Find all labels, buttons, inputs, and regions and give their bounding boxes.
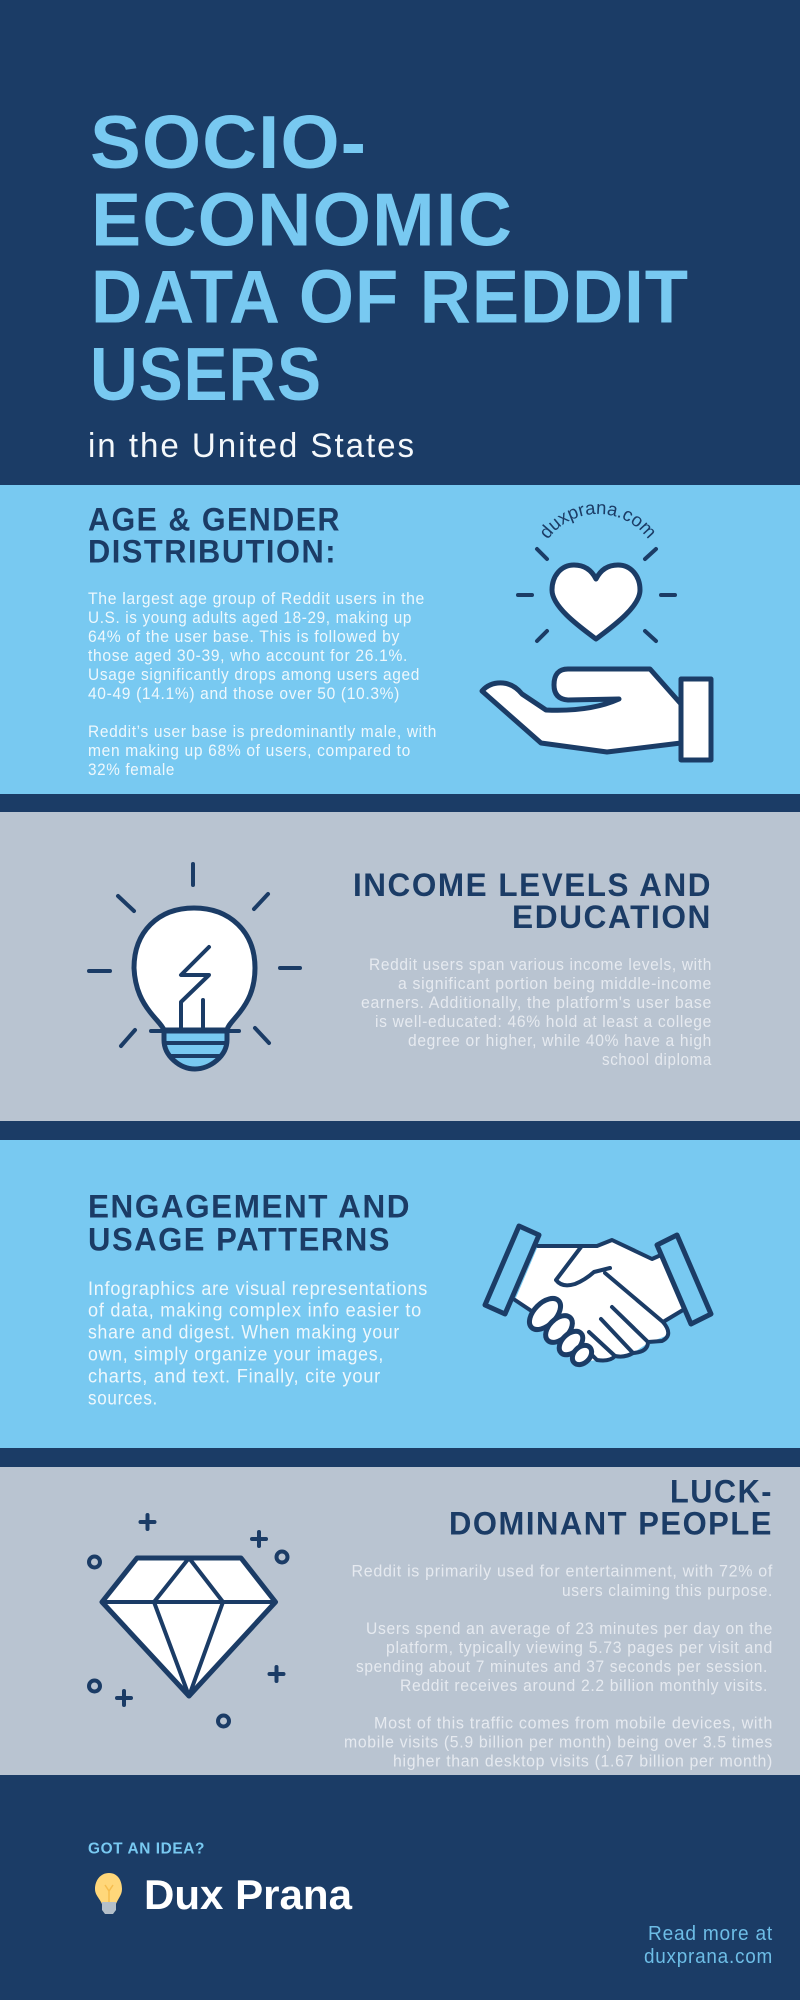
text block: age and gender statistics: [88, 590, 437, 779]
heading: luck-dominant people: LUCK-: [670, 1474, 773, 1510]
heading: engagement and usage patterns: USAGE PATTERNS: [88, 1222, 391, 1258]
text block: income and education statistics: school diploma: [602, 1051, 712, 1069]
title: ECONOMIC: [91, 178, 513, 262]
heading: luck-dominant people: DOMINANT PEOPLE: [449, 1506, 773, 1542]
panel: luck-dominant people: [0, 1467, 800, 1775]
text block: infographics description: [88, 1279, 428, 1410]
panel: income levels and education: [0, 812, 800, 1121]
icon: diamond with sparkles: [89, 1515, 288, 1726]
text block: income and education statistics: [361, 956, 712, 1069]
text block: income and education statistics: degree or higher, while 40% have a high: [408, 1032, 712, 1050]
text block: usage and traffic statistics: spending about 7 minutes and 37 seconds per session.: [356, 1658, 768, 1676]
text block: age and gender statistics: 40-49 (14.1%) and those over 50 (10.3%): [88, 685, 400, 703]
text block: age and gender statistics: U.S. is young adults aged 18-29, making up: [88, 609, 412, 627]
text block: age and gender statistics: Reddit’s user base is predominantly male, with: [88, 723, 437, 741]
title: SOCIO-: [90, 100, 367, 184]
footer: bulb emoji icon: [95, 1873, 122, 1914]
text block: age and gender statistics: Usage significantly drops among users aged: [88, 666, 420, 684]
footer: Dux Prana brand name: Dux Prana: [144, 1871, 353, 1918]
text block: usage and traffic statistics: Most of this traffic comes from mobile devices, with: [374, 1714, 773, 1732]
footer: read more link: Read more at: [648, 1923, 773, 1945]
text block: infographics description: share and digest. When making your: [88, 1322, 400, 1344]
text block: usage and traffic statistics: Reddit receives around 2.2 billion monthly visits.: [400, 1677, 768, 1695]
text block: age and gender statistics: The largest age group of Reddit users in the: [88, 590, 425, 608]
heading: engagement and usage patterns: ENGAGEMENT AND: [88, 1188, 411, 1224]
text block: income and education statistics: a significant portion being middle-income: [398, 975, 712, 993]
text block: usage and traffic statistics: platform, typically viewing 5.73 pages per visit and: [386, 1639, 773, 1657]
icon: handshake: [485, 1226, 711, 1368]
title: [90, 100, 689, 416]
panel: age and gender distribution: [0, 485, 800, 794]
heading: luck-dominant people: [449, 1474, 773, 1542]
text block: infographics description: own, simply organize your images,: [88, 1344, 384, 1366]
text block: usage and traffic statistics: Reddit is primarily used for entertainment, with 72% of: [352, 1562, 773, 1580]
heading: age and gender: DISTRIBUTION:: [88, 534, 337, 570]
curved site label: [542, 504, 654, 538]
text block: age and gender statistics: men making up 68% of users, compared to: [88, 742, 411, 760]
text block: usage and traffic statistics: mobile visits (5.9 billion per month) being over 3.5 times: [344, 1734, 773, 1752]
heading: age and gender: AGE & GENDER: [88, 502, 341, 538]
heading: income levels and education: INCOME LEVELS AND: [353, 867, 712, 903]
text block: infographics description: sources.: [88, 1388, 158, 1410]
panel: engagement and usage patterns: [0, 1140, 800, 1448]
text block: infographics description: Infographics are visual representations: [88, 1279, 428, 1300]
text block: usage and traffic statistics: users claiming this purpose.: [562, 1582, 773, 1600]
icon: heart in open hand: [482, 549, 711, 760]
text block: usage and traffic statistics: Users spend an average of 23 minutes per day on the: [366, 1620, 773, 1638]
heading: age and gender: [88, 502, 341, 570]
footer: got an idea label: GOT AN IDEA?: [88, 1840, 205, 1858]
text block: income and education statistics: Reddit users span various income levels, with: [369, 956, 712, 974]
title: USERS: [90, 332, 322, 416]
text block: age and gender statistics: 64% of the user base. This is followed by: [88, 628, 400, 646]
footer: read more link: [644, 1923, 773, 1968]
curved site label: duxprana.com: [542, 504, 654, 538]
heading: engagement and usage patterns: [88, 1188, 411, 1258]
text block: usage and traffic statistics: [344, 1562, 773, 1770]
heading: income levels and education: EDUCATION: [512, 899, 712, 935]
text block: infographics description: charts, and text. Finally, cite your: [88, 1366, 381, 1388]
text block: income and education statistics: earners. Additionally, the platform's user base: [361, 994, 712, 1012]
text block: age and gender statistics: those aged 30-39, who account for 26.1%.: [88, 647, 408, 665]
text block: income and education statistics: is well-educated: 46% hold at least a college: [375, 1013, 712, 1031]
icon: light bulb: [89, 864, 300, 1069]
text block: usage and traffic statistics: higher than desktop visits (1.67 billion per month): [393, 1752, 773, 1770]
text block: infographics description: of data, making complex info easier to: [88, 1300, 422, 1322]
title: DATA OF REDDIT: [91, 254, 689, 338]
subtitle: in the United States: [88, 427, 416, 465]
heading: income levels and education: [353, 867, 712, 935]
footer: read more link: duxprana.com: [644, 1946, 773, 1968]
text block: age and gender statistics: 32% female: [88, 761, 175, 779]
